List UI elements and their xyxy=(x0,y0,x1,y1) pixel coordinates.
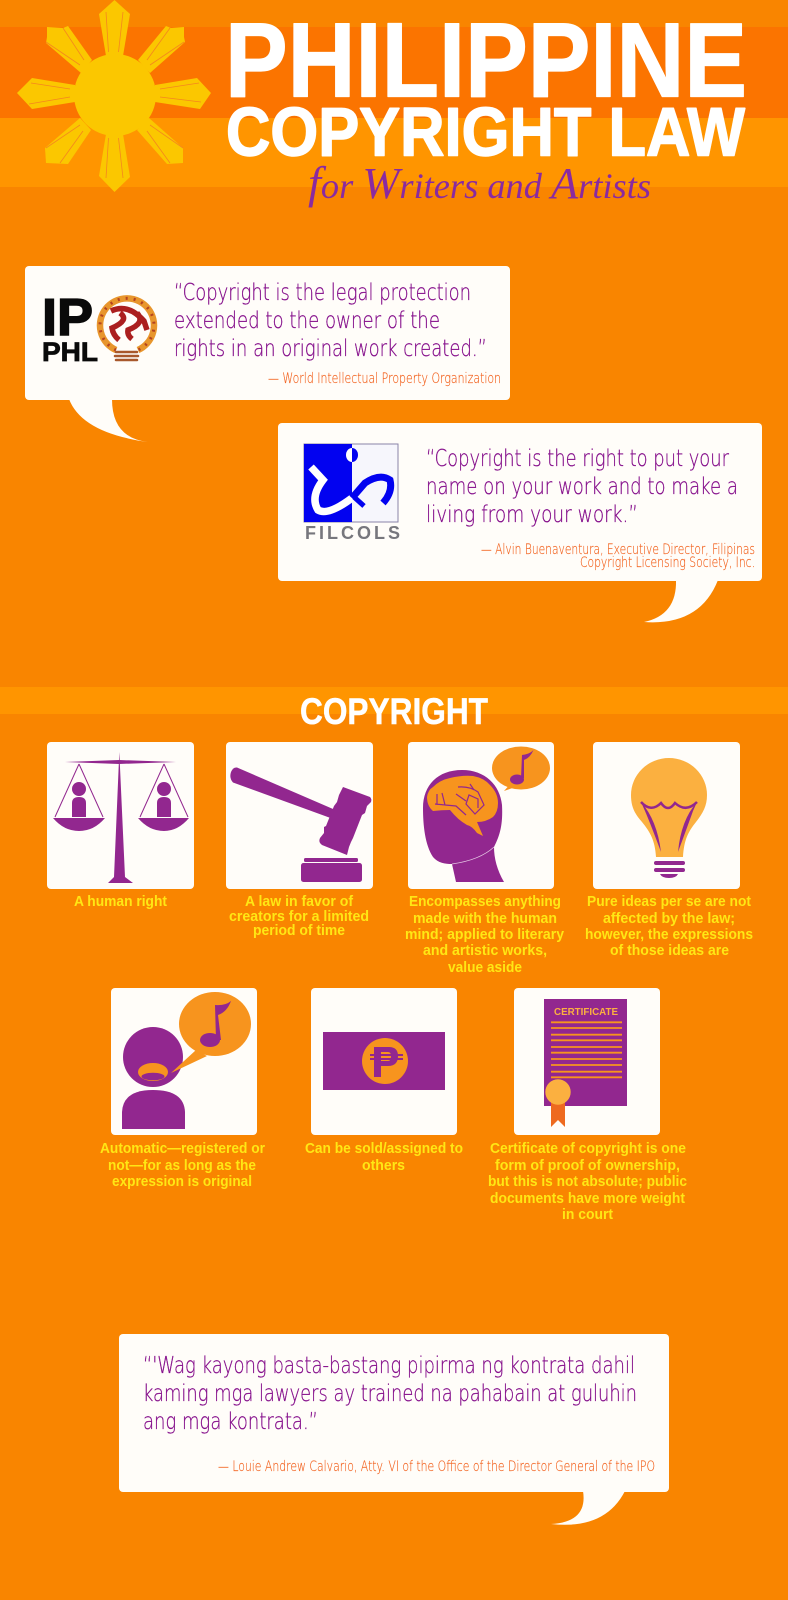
caption: documents have more weight xyxy=(490,1191,685,1207)
icon: scales of justice xyxy=(53,752,189,883)
quote text: extended to the owner of the xyxy=(174,308,440,334)
icon: FILCOLS logo xyxy=(304,444,400,543)
caption: however, the expressions xyxy=(585,927,753,943)
caption: value aside xyxy=(448,960,522,976)
icon: Philippine sun xyxy=(17,0,211,192)
caption xyxy=(100,1141,265,1190)
caption: and artistic works, xyxy=(423,943,547,959)
caption: others xyxy=(362,1158,405,1174)
quote text: ang mga kontrata.” xyxy=(143,1409,318,1435)
caption: Can be sold/assigned to xyxy=(305,1141,463,1157)
caption: Encompasses anything xyxy=(409,894,561,910)
icon: peso bill xyxy=(323,1032,445,1090)
attribution: — World Intellectual Property Organization xyxy=(268,371,501,387)
caption: form of proof of ownership, xyxy=(495,1158,680,1174)
icon: head with brain and music bubble xyxy=(423,746,550,882)
panel: certificate card xyxy=(488,988,687,1223)
caption: not—for as long as the xyxy=(108,1158,256,1174)
panel: WIPO quote bubble xyxy=(25,266,510,442)
quote text: “Copyright is the legal protection xyxy=(174,280,471,306)
caption: Pure ideas per se are not xyxy=(587,894,751,910)
icon: certificate: CERTIFICATE xyxy=(554,1006,618,1018)
caption xyxy=(405,894,564,976)
quote text: “'Wag kayong basta-bastang pipirma ng kontrata dahil xyxy=(143,1353,635,1379)
icon: FILCOLS logo: FILCOLS xyxy=(305,523,400,543)
caption xyxy=(585,894,753,959)
caption: Automatic—registered or xyxy=(100,1141,265,1157)
quote text: kaming mga lawyers ay trained na pahabain at guluhin xyxy=(143,1381,637,1407)
quote text: living from your work.” xyxy=(426,502,638,528)
panel: lawyer quote bubble xyxy=(119,1334,669,1525)
icon: IPOPHL logo: IP xyxy=(42,289,93,347)
caption: made with the human xyxy=(413,911,557,927)
caption: period of time xyxy=(253,923,345,939)
panel: human mind card xyxy=(405,742,564,976)
icon: gavel xyxy=(230,767,371,882)
caption: affected by the law; xyxy=(603,911,735,927)
panel: FILCOLS quote bubble xyxy=(278,423,762,622)
panel: sold or assigned card xyxy=(305,988,463,1174)
icon: IPOPHL logo: PHL xyxy=(42,337,98,367)
title xyxy=(225,2,747,170)
panel: automatic card xyxy=(100,988,265,1190)
caption xyxy=(488,1141,687,1223)
quote text xyxy=(174,280,487,362)
panel: law card xyxy=(226,742,373,939)
caption: in court xyxy=(562,1207,613,1223)
caption: but this is not absolute; public xyxy=(488,1174,687,1190)
caption: A human right xyxy=(74,894,167,910)
quote text xyxy=(143,1353,637,1435)
subtitle: for Writers and Artists xyxy=(308,157,651,208)
panel: human right card xyxy=(47,742,194,910)
icon: person singing xyxy=(122,992,251,1129)
quote text xyxy=(426,446,738,528)
caption: expression is original xyxy=(112,1174,252,1190)
section band: copyright heading: COPYRIGHT xyxy=(300,691,488,732)
quote text: rights in an original work created.” xyxy=(174,336,487,362)
section band: copyright heading xyxy=(0,687,788,732)
caption xyxy=(229,894,369,939)
caption: mind; applied to literary xyxy=(405,927,564,943)
caption: A law in favor of xyxy=(245,894,353,910)
header banner xyxy=(0,27,788,187)
caption: of those ideas are xyxy=(610,943,729,959)
icon: light bulb xyxy=(631,758,707,878)
attribution xyxy=(481,542,755,571)
icon: IPOPHL logo xyxy=(42,289,154,367)
caption: Certificate of copyright is one xyxy=(490,1141,686,1157)
icon: certificate xyxy=(544,999,627,1127)
caption: creators for a limited xyxy=(229,909,369,925)
attribution: — Louie Andrew Calvario, Atty. VI of the Office of the Director General of the IPO xyxy=(218,1459,655,1475)
caption xyxy=(305,1141,463,1174)
panel: ideas card xyxy=(585,742,753,959)
